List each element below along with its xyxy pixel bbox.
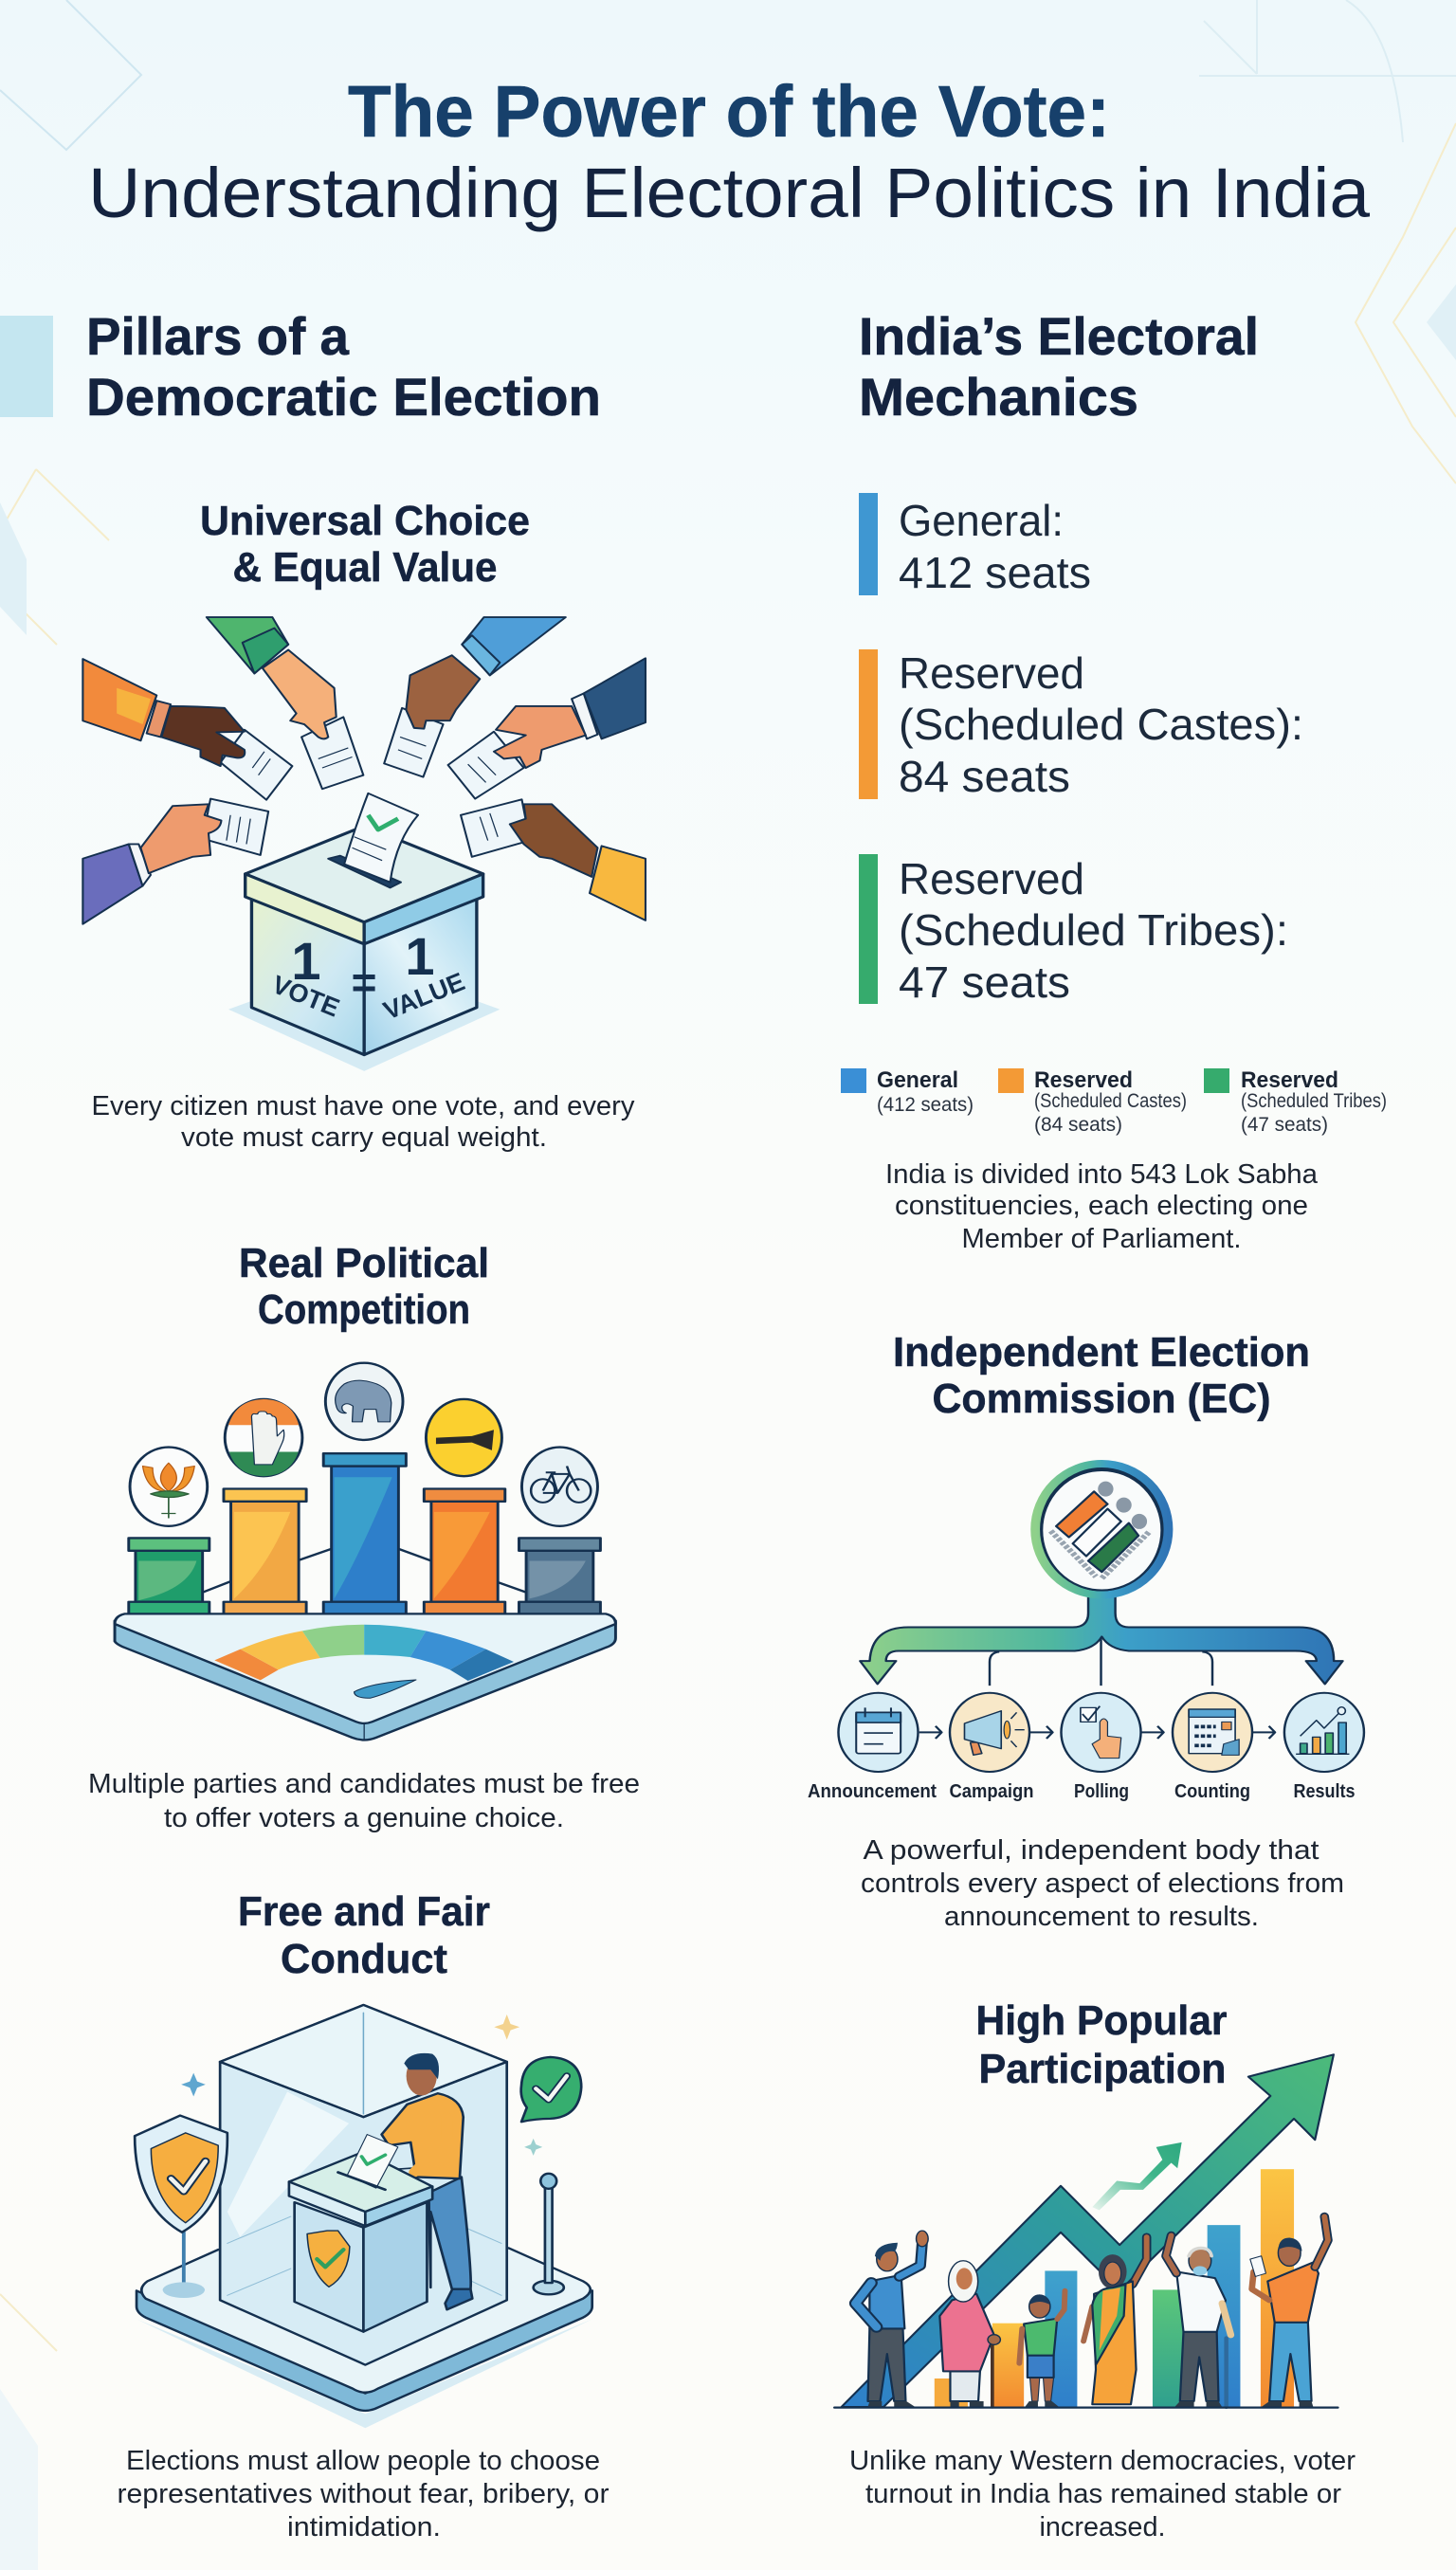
seat breakdown: scheduled castes: 84 seats — [899, 752, 1070, 801]
box text: 1 vote = 1 value: VALUE — [379, 967, 468, 1026]
text: participation description: turnout in India has remained stable or — [865, 2479, 1341, 2509]
person: man with phone — [1250, 2216, 1328, 2407]
seat breakdown: scheduled castes: (Scheduled Castes): — [899, 700, 1303, 749]
legend — [841, 1067, 1387, 1136]
shield with stand — [135, 2116, 228, 2298]
seat breakdown: scheduled tribes: 47 seats — [899, 957, 1070, 1007]
seat breakdown: general: 412 seats — [899, 548, 1091, 597]
symbol: broom — [426, 1399, 501, 1476]
text: free and fair description: Elections must allow people to choose — [126, 2446, 600, 2476]
hand: navy sleeve — [448, 658, 646, 799]
voter — [382, 2053, 472, 2309]
pillar: slate — [519, 1538, 600, 1613]
person: elderly man — [1166, 2235, 1230, 2407]
heading: real political competition: Real Political — [239, 1240, 489, 1286]
step arrows — [919, 1726, 1275, 1739]
gauge — [214, 1625, 514, 1698]
title: Understanding Electoral Politics in India — [88, 154, 1371, 232]
step: results — [1284, 1693, 1364, 1772]
title: The Power of the Vote: — [348, 71, 1110, 153]
heading: free and fair conduct: Conduct — [281, 1936, 447, 1982]
seat breakdown: general — [859, 493, 1091, 597]
legend: Reserved — [1034, 1067, 1133, 1093]
step labels: Counting — [1174, 1781, 1250, 1802]
text: lok sabha description: constituencies, each electing one — [895, 1191, 1308, 1221]
step labels: Polling — [1074, 1781, 1129, 1802]
text: election commission description: A powerful, independent body that — [863, 1835, 1320, 1866]
section heading: mechanics — [859, 306, 1259, 427]
text: free and fair description: representatives without fear, bribery, or — [118, 2479, 610, 2509]
text: participation description: Unlike many Western democracies, voter — [849, 2446, 1356, 2476]
pillar: yellow — [224, 1489, 306, 1613]
hand: blue sleeve — [384, 617, 566, 777]
text: free and fair description — [118, 2446, 610, 2543]
box text: 1 vote = 1 value: 1 — [291, 931, 321, 991]
heading: free and fair conduct: Free and Fair — [238, 1888, 490, 1935]
legend: (412 seats) — [877, 1094, 974, 1116]
small ballot box — [289, 2135, 432, 2332]
heading: independent election commission — [893, 1329, 1310, 1422]
small arrow — [1092, 2142, 1182, 2210]
heading: universal choice — [200, 498, 530, 591]
person: man in blue — [856, 2231, 928, 2407]
text: universal choice description: vote must carry equal weight. — [181, 1122, 547, 1153]
pillar: green — [129, 1538, 209, 1613]
section heading: pillars: Democratic Election — [86, 367, 601, 427]
ballot box — [246, 793, 483, 1055]
section heading: pillars: Pillars of a — [86, 306, 350, 366]
legend: (Scheduled Castes) — [1034, 1090, 1187, 1112]
step labels: Campaign — [950, 1781, 1033, 1802]
legend: General — [877, 1067, 958, 1093]
person: woman in hijab — [939, 2261, 1000, 2407]
step: counting — [1173, 1693, 1252, 1772]
symbol: hand on tricolor — [225, 1399, 302, 1476]
heading: high popular participation: High Popular — [976, 1997, 1227, 2044]
text: election commission description — [861, 1835, 1344, 1932]
section heading: mechanics: Mechanics — [859, 367, 1138, 427]
legend: (84 seats) — [1034, 1114, 1122, 1136]
person: boy — [1019, 2290, 1065, 2407]
accent block — [0, 316, 53, 417]
heading: real political competition — [239, 1240, 489, 1333]
text: competition description: Multiple parties and candidates must be free — [88, 1769, 640, 1799]
text: lok sabha description — [885, 1159, 1319, 1254]
glass booth — [220, 2005, 507, 2365]
text: participation description: increased. — [1039, 2512, 1166, 2543]
platform — [136, 2248, 592, 2428]
hand: yellow sleeve — [461, 799, 646, 920]
illustration: hands casting ballots into box — [82, 617, 646, 1071]
platform — [115, 1613, 615, 1741]
branching arrows — [860, 1590, 1343, 1684]
sparkles — [181, 2014, 542, 2156]
big rising arrow — [842, 2054, 1334, 2407]
seat breakdown: scheduled castes: Reserved — [899, 648, 1084, 698]
hand: green sleeve — [207, 617, 363, 789]
legend: (47 seats) — [1241, 1114, 1328, 1136]
heading: independent election commission: Commission (EC) — [933, 1376, 1270, 1422]
text: lok sabha description: Member of Parliament. — [961, 1224, 1242, 1254]
EC emblem — [1031, 1461, 1173, 1598]
hand: purple sleeve — [82, 799, 268, 924]
box text: 1 vote = 1 value: 1 — [405, 926, 435, 986]
person: woman in saree — [1083, 2237, 1147, 2404]
check bubble — [521, 2057, 581, 2122]
stanchion — [534, 2174, 564, 2294]
section heading: mechanics: India’s Electoral — [859, 306, 1259, 366]
seat breakdown: scheduled castes — [859, 648, 1303, 801]
text: lok sabha description: India is divided into 543 Lok Sabha — [885, 1159, 1319, 1190]
symbol: lotus — [130, 1448, 208, 1526]
text: universal choice description — [91, 1091, 635, 1153]
step: campaign — [950, 1693, 1029, 1772]
seat breakdown: scheduled tribes: Reserved — [899, 854, 1084, 903]
symbol: bicycle — [521, 1448, 597, 1526]
title — [88, 71, 1371, 232]
text: election commission description: controls every aspect of elections from — [861, 1868, 1344, 1899]
heading: independent election commission: Independent Election — [893, 1329, 1310, 1376]
legend: Reserved — [1241, 1067, 1338, 1093]
text: universal choice description: Every citizen must have one vote, and every — [91, 1091, 635, 1121]
heading: real political competition: Competition — [258, 1286, 470, 1333]
section heading: pillars — [86, 306, 601, 427]
step: announcement — [838, 1693, 919, 1772]
diagram: election commission process — [838, 1461, 1364, 1772]
text: competition description: to offer voters a genuine choice. — [164, 1803, 564, 1833]
heading: universal choice: Universal Choice — [200, 498, 530, 544]
text: participation description — [849, 2446, 1356, 2543]
box text: 1 vote = 1 value — [268, 926, 468, 1026]
step labels — [808, 1781, 1356, 1802]
box text: 1 vote = 1 value: = — [352, 957, 376, 1007]
chart: rising turnout with citizens — [834, 2054, 1338, 2408]
text: election commission description: announcement to results. — [944, 1902, 1259, 1932]
pillar: blue — [323, 1453, 406, 1613]
illustration: party pillars on platform — [115, 1363, 615, 1741]
heading: free and fair conduct — [238, 1888, 490, 1982]
hand: orange sleeve — [82, 659, 292, 800]
step labels: Announcement — [808, 1781, 937, 1802]
seat breakdown: scheduled tribes: (Scheduled Tribes): — [899, 905, 1288, 955]
step: polling — [1061, 1693, 1141, 1772]
legend: (Scheduled Tribes) — [1241, 1090, 1387, 1112]
illustration: glass voting booth — [135, 2005, 592, 2428]
step labels: Results — [1293, 1781, 1356, 1802]
text: free and fair description: intimidation. — [287, 2512, 441, 2543]
seat breakdown: scheduled tribes — [859, 854, 1288, 1007]
heading: high popular participation — [976, 1997, 1227, 2092]
text: competition description — [88, 1769, 640, 1833]
pillar: orange — [424, 1489, 505, 1613]
bars — [935, 2169, 1294, 2407]
heading: high popular participation: Participation — [978, 2046, 1227, 2092]
symbol: elephant — [325, 1363, 403, 1440]
heading: universal choice: & Equal Value — [233, 544, 497, 591]
box text: 1 vote = 1 value: VOTE — [268, 970, 343, 1023]
seat breakdown: general: General: — [899, 496, 1064, 545]
